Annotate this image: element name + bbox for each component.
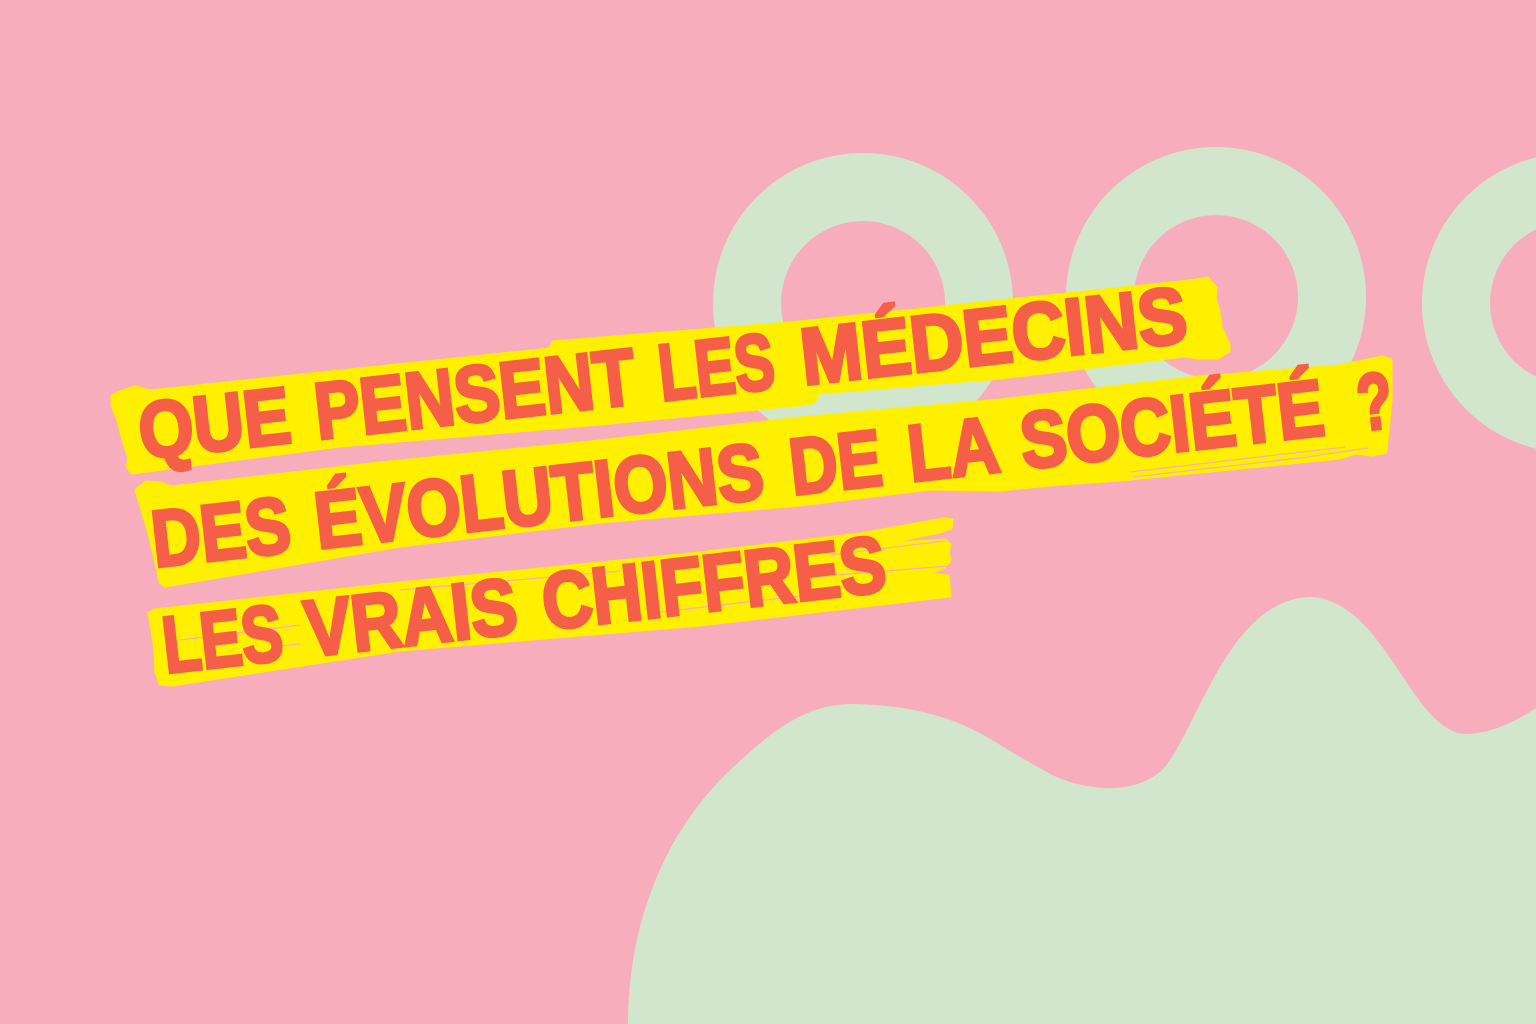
decorative green rings: [747, 181, 1536, 419]
heading: line 2: DE: [785, 413, 886, 512]
heading: line 3: LES: [158, 588, 287, 690]
heading: line 3: [158, 519, 890, 690]
heading: line 2: LA: [903, 400, 1004, 498]
heading: line 2: ?: [1352, 355, 1397, 448]
heading: line 1: PENSENT: [310, 332, 640, 456]
heading: line 2: [147, 355, 1397, 584]
heading: line 3: CHIFFRES: [537, 519, 890, 647]
green blob: [628, 597, 1536, 1024]
heading: line 3: VRAIS: [300, 561, 522, 674]
heading: line 2: SOCIÉTÉ: [1015, 363, 1328, 486]
highlight: line 2: [136, 357, 1391, 586]
highlight: line 1: [112, 278, 1229, 473]
highlight streaks: [180, 447, 1368, 646]
title: [112, 270, 1397, 690]
heading: line 1: QUE: [134, 371, 295, 476]
heading: line 1: [134, 270, 1191, 476]
heading: line 1: LES: [654, 316, 779, 418]
heading: line 1: MÉDECINS: [796, 270, 1191, 402]
highlight: line 3: [149, 519, 952, 685]
heading: line 2: ÉVOLUTIONS: [310, 426, 768, 565]
heading: line 2: DES: [147, 480, 295, 584]
